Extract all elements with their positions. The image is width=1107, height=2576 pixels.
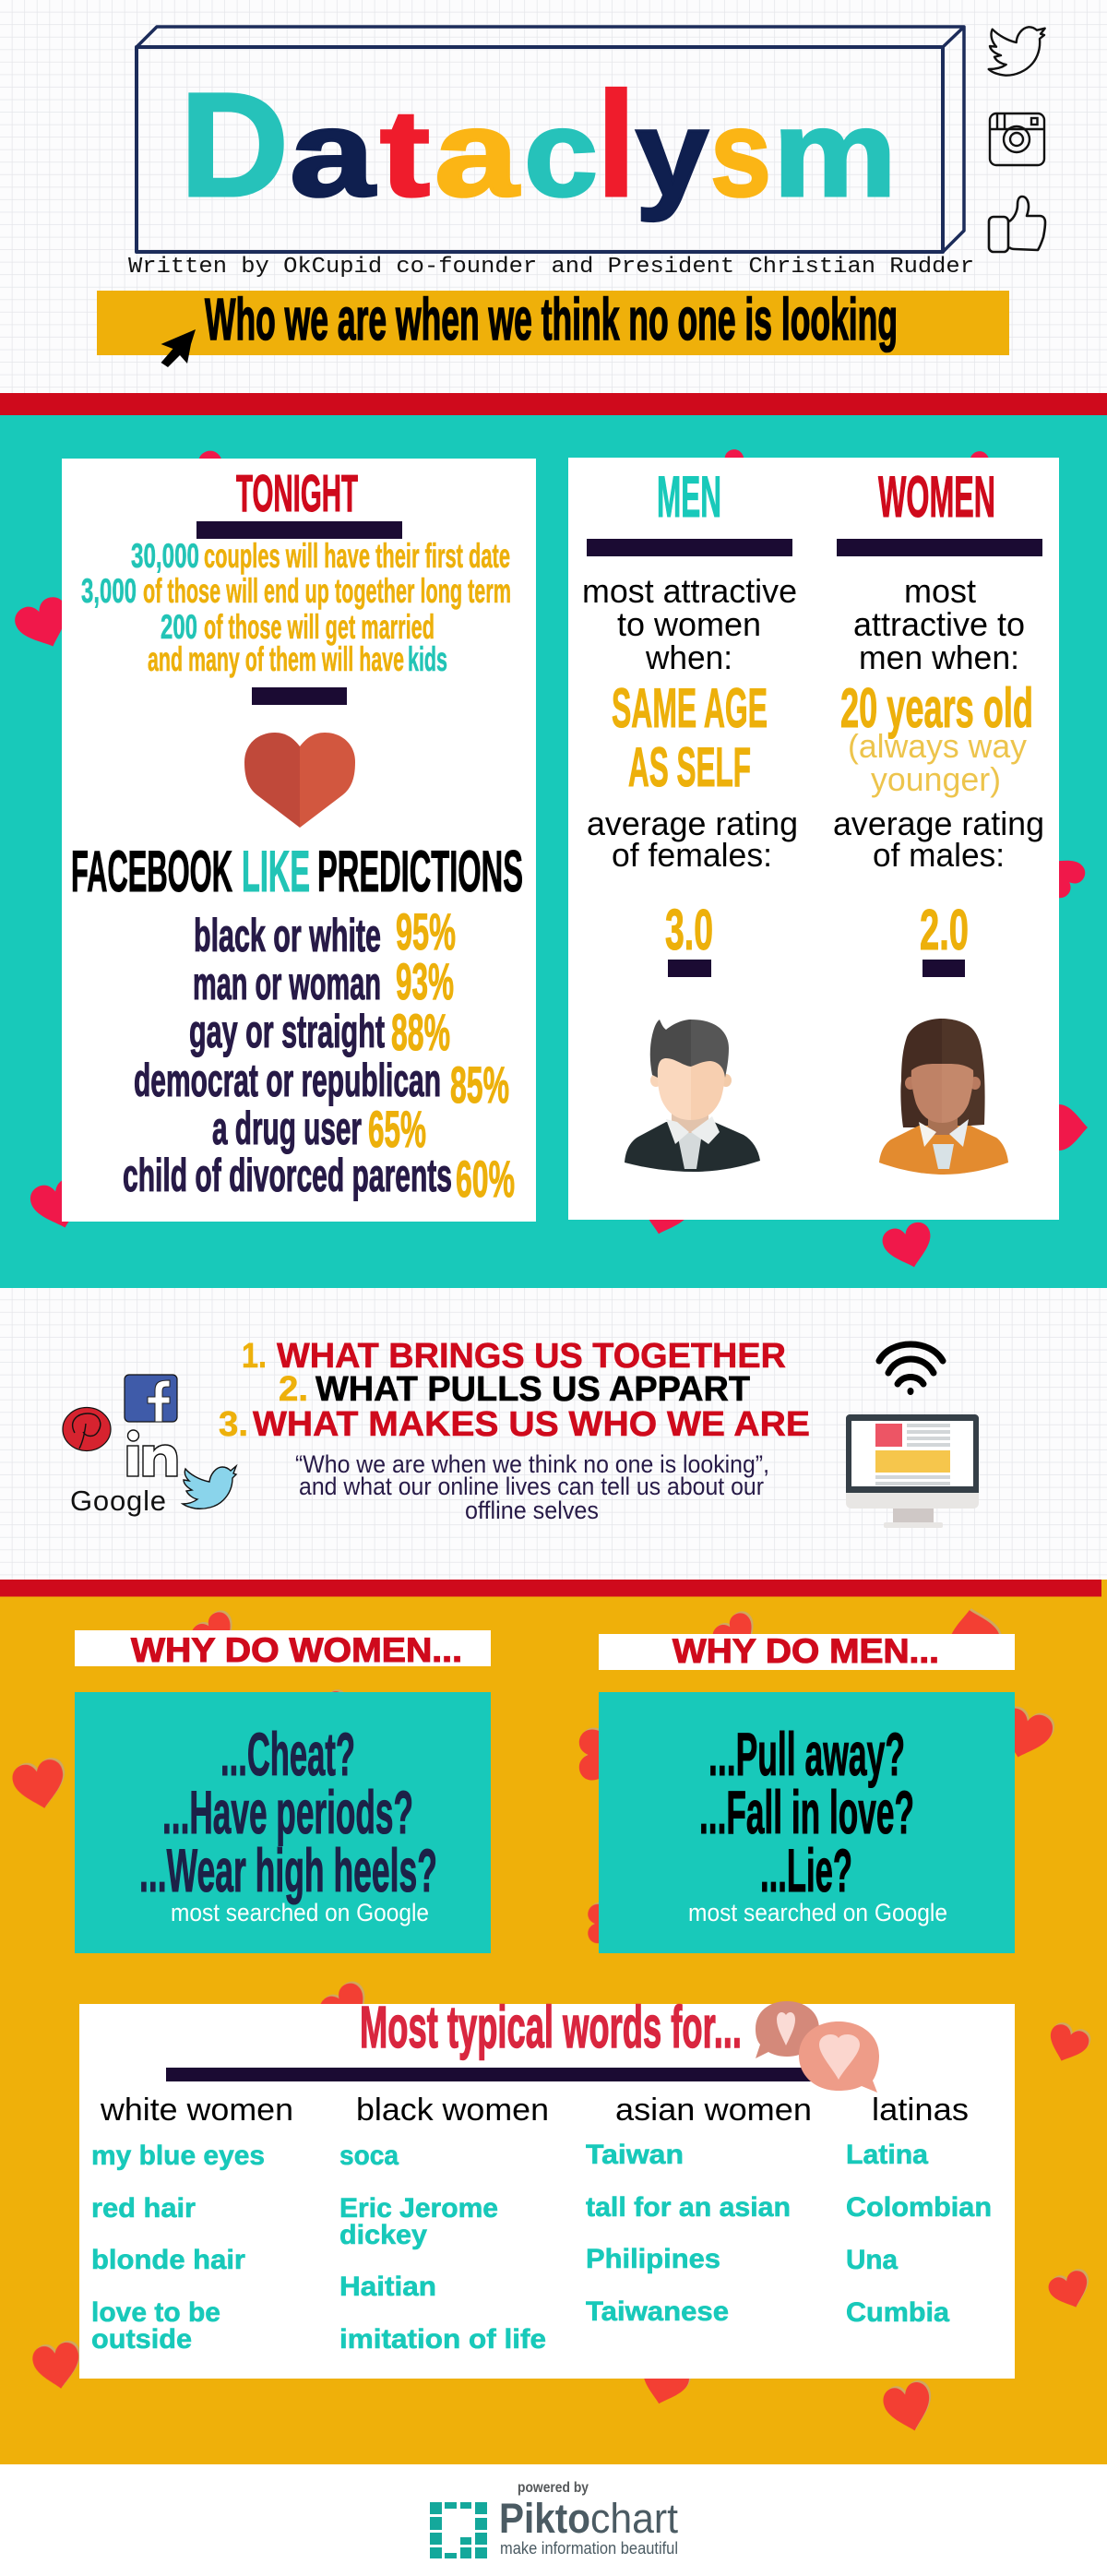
panel: women searches: most searched on Google	[171, 1899, 429, 1926]
text block: men attractive: when:	[645, 638, 732, 676]
panel: men and women comparison	[568, 458, 1059, 1220]
list: black women words: Eric Jerome	[339, 2193, 498, 2224]
list: white women words: blonde hair	[91, 2245, 245, 2275]
gold section background	[0, 1580, 1107, 2464]
heading: men: MEN	[657, 465, 721, 530]
list: white women words: love to be	[91, 2297, 220, 2328]
column headers: white women	[100, 2093, 293, 2128]
list: black women words: Haitian	[339, 2272, 436, 2302]
panel: women searches	[75, 1692, 491, 1953]
text block: average rating of females: average rating	[587, 805, 798, 842]
heading: what brings us together list: 2.	[279, 1370, 308, 1409]
heading: what brings us together list: WHAT PULLS US APPART	[315, 1370, 750, 1409]
list: latinas words: Latina	[846, 2140, 928, 2170]
list: asian women words: tall for an asian	[586, 2192, 791, 2223]
list: asian women words: Taiwan	[586, 2140, 684, 2170]
text block: women attractive: most	[904, 572, 976, 610]
icon: desktop monitor	[846, 1414, 979, 1528]
icon: speech bubble hearts	[756, 2001, 879, 2093]
list: latinas words: Cumbia	[846, 2297, 949, 2328]
divider bar	[252, 687, 347, 705]
callout: same age as self: AS SELF	[628, 736, 751, 798]
title: Dataclysm: s	[710, 86, 771, 222]
list: facebook prediction percentages: child of divorced parents	[123, 1150, 452, 1201]
heading: what brings us together list: WHAT BRINGS US TOGETHER	[277, 1337, 786, 1376]
list: asian women words	[586, 2140, 791, 2327]
icon: facebook	[125, 1375, 177, 1422]
panel: women searches: ...Cheat?	[220, 1720, 355, 1788]
callout: same age as self	[612, 677, 768, 798]
text block: tonight statistics: couples will have their first date	[204, 537, 510, 575]
powered by label: powered by	[518, 2480, 589, 2496]
list: facebook prediction percentages: 88%	[391, 1003, 450, 1061]
text block: women attractive: men when:	[859, 638, 1019, 676]
list: black women words: imitation of life	[339, 2324, 546, 2355]
heading: why do men: WHY DO MEN...	[673, 1632, 939, 1670]
panel: men searches: ...Pull away?	[708, 1720, 905, 1788]
title: Dataclysm: a	[290, 86, 375, 222]
text block: tonight statistics	[81, 537, 511, 678]
icon: instagram outline	[990, 113, 1044, 165]
text block: average rating of males: of males:	[873, 836, 1005, 874]
title: Dataclysm: y	[636, 86, 708, 222]
list: facebook prediction percentages: 95%	[396, 902, 456, 960]
subtitle: author credit: Written by OkCupid co-founder and President Christian Rudder	[128, 255, 974, 280]
text block: tonight statistics: of those will get married	[204, 608, 434, 646]
title: Dataclysm: l	[597, 62, 636, 228]
text block: women attractive: attractive to	[853, 605, 1025, 643]
heading: what brings us together list: 1.	[242, 1337, 267, 1376]
title: Dataclysm: a	[434, 86, 519, 222]
icon: twitter outline	[989, 27, 1045, 76]
text block: quote: and what our online lives can tell us about our	[299, 1473, 764, 1500]
text block: men attractive: most attractive	[582, 572, 797, 610]
text block: tonight statistics: and many of them will have	[148, 640, 404, 678]
heading: facebook like predictions: LIKE	[242, 840, 310, 904]
list: white women words: my blue eyes	[91, 2141, 265, 2171]
list: facebook prediction percentages: gay or straight	[189, 1006, 385, 1057]
list: white women words: red hair	[91, 2193, 196, 2224]
title box	[137, 27, 964, 252]
icon: thumbs up outline	[989, 197, 1045, 252]
title: Dataclysm: D	[180, 62, 289, 227]
panel: men searches	[599, 1692, 1015, 1953]
callout: 20 years old: (always way	[848, 727, 1027, 765]
red divider bar	[0, 1580, 1101, 1596]
column headers: latinas	[872, 2093, 969, 2128]
column headers: black women	[356, 2093, 549, 2128]
list: black women words: dickey	[339, 2220, 427, 2250]
list: facebook prediction percentages	[123, 902, 515, 1208]
red divider bar	[0, 393, 1107, 415]
icon: man avatar	[625, 1020, 760, 1172]
text block: average rating of males: average rating	[833, 805, 1044, 842]
list: white women words	[91, 2141, 265, 2355]
panel: men searches: ...Fall in love?	[699, 1778, 914, 1846]
title: Dataclysm	[180, 62, 897, 228]
icon: piktochart logo	[430, 2502, 487, 2558]
divider bar	[196, 521, 402, 539]
heading: facebook like predictions: FACEBOOK	[71, 840, 232, 904]
heading: facebook like predictions: PREDICTIONS	[317, 840, 523, 904]
heading: women: WOMEN	[878, 465, 995, 530]
icon: wifi	[879, 1344, 943, 1395]
logo wordmark: make information beautiful	[500, 2539, 678, 2558]
icon: twitter bird	[183, 1466, 236, 1509]
icon: linkedin	[127, 1430, 177, 1476]
text block: tonight statistics: of those will end up together long term	[143, 572, 511, 610]
title: Dataclysm: m	[773, 86, 897, 222]
icon: cursor arrow	[161, 329, 196, 367]
list: asian women words: Taiwanese	[586, 2296, 729, 2327]
heading: what brings us together list	[219, 1337, 810, 1444]
list: latinas words: Colombian	[846, 2192, 992, 2223]
list: facebook prediction percentages: a drug user	[212, 1103, 362, 1154]
icon: google wordmark: Google	[70, 1485, 166, 1517]
list: facebook prediction percentages: 60%	[456, 1150, 515, 1208]
list: latinas words: Una	[846, 2245, 898, 2275]
heading: why do men	[599, 1632, 1015, 1670]
list: facebook prediction percentages: 85%	[450, 1055, 509, 1114]
panel: men searches: most searched on Google	[688, 1899, 947, 1926]
divider bars	[587, 539, 1042, 556]
list: facebook prediction percentages: 65%	[368, 1100, 426, 1158]
list: black women words: soca	[339, 2141, 399, 2171]
number: men rating: 3.0	[665, 899, 713, 962]
callout: same age as self: SAME AGE	[612, 677, 768, 739]
text block: men attractive: to women	[617, 605, 761, 643]
panel: women searches: ...Have periods?	[162, 1778, 413, 1846]
text block: average rating of females	[587, 805, 798, 874]
heading: most typical words: Most typical words for...	[360, 1994, 742, 2060]
logo wordmark: chart	[590, 2495, 678, 2542]
list: facebook prediction percentages: man or woman	[193, 958, 381, 1009]
text block: women attractive	[853, 572, 1025, 676]
column headers: asian women	[615, 2093, 812, 2128]
panel: men searches: ...Lie?	[760, 1836, 852, 1904]
icon: pinterest	[63, 1408, 111, 1450]
panel: most typical words	[79, 1994, 1015, 2379]
text block: tonight statistics: kids	[408, 640, 447, 678]
text block: average rating of males	[833, 805, 1044, 874]
logo wordmark	[499, 2495, 678, 2558]
text block: average rating of females: of females:	[612, 836, 772, 874]
text block: tonight statistics: 30,000	[131, 537, 199, 575]
footer: piktochart credit	[0, 2464, 1107, 2576]
text block: quote	[295, 1450, 769, 1524]
text block: tonight statistics: 3,000	[81, 572, 137, 610]
text block: quote: “Who we are when we think no one is looking”,	[295, 1450, 769, 1478]
heading: what brings us together list: WHAT MAKES US WHO WE ARE	[253, 1405, 810, 1444]
panel: tonight and facebook predictions	[62, 459, 536, 1222]
heading: tonight: TONIGHT	[236, 464, 358, 523]
icon: heart	[244, 733, 355, 828]
icons: social networks	[63, 1375, 236, 1517]
icon: woman avatar	[879, 1019, 1008, 1175]
list: white women words: outside	[91, 2324, 192, 2355]
logo wordmark: Pikto	[499, 2495, 590, 2542]
text block: quote: offline selves	[465, 1497, 599, 1524]
list: facebook prediction percentages: democrat or republican	[134, 1055, 441, 1106]
decorative hearts on teal	[11, 446, 1089, 1273]
column headers	[100, 2093, 969, 2128]
teal section background	[0, 415, 1107, 1288]
text block: tonight statistics: 200	[161, 608, 197, 646]
title: Dataclysm: c	[524, 86, 598, 222]
callout: 20 years old	[840, 677, 1033, 798]
number: women rating: 2.0	[920, 899, 969, 962]
decorative hearts on gold	[10, 1605, 1094, 2437]
divider bars	[668, 960, 965, 977]
list: black women words	[339, 2141, 546, 2355]
text block: men attractive	[582, 572, 797, 676]
panel: women searches: ...Wear high heels?	[139, 1836, 437, 1904]
heading: what brings us together list: 3.	[219, 1405, 248, 1444]
list: facebook prediction percentages: 93%	[396, 952, 454, 1010]
list: facebook prediction percentages: black or white	[194, 910, 381, 961]
list: latinas words	[846, 2140, 992, 2328]
callout: 20 years old: younger)	[871, 760, 1001, 798]
list: asian women words: Philipines	[586, 2244, 720, 2274]
title: Dataclysm: t	[380, 86, 430, 222]
heading: why do women: WHY DO WOMEN...	[131, 1631, 462, 1669]
divider bar	[166, 2068, 812, 2081]
